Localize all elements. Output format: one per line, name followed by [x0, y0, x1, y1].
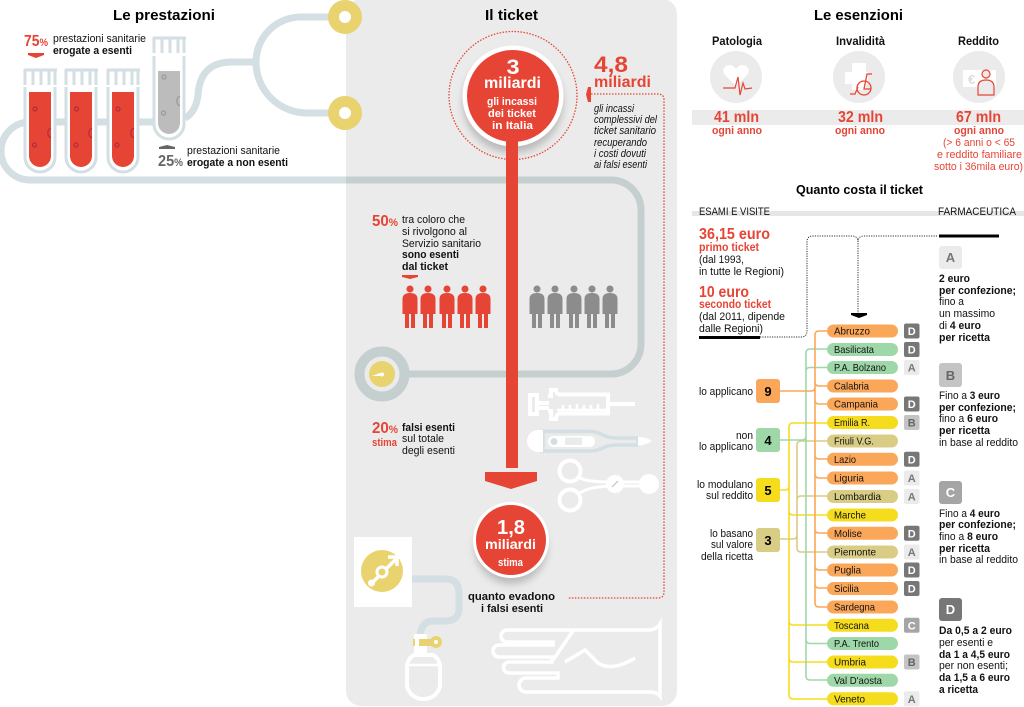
farmaceutica: tier B	[939, 363, 1018, 449]
callout: 4,8 miliardi: miliardi	[594, 74, 651, 91]
column: reddito: e reddito familiare	[937, 149, 1022, 161]
panel: il ticket background	[346, 0, 677, 706]
callout: 4,8 miliardi: recuperando	[594, 137, 647, 149]
callout: 4,8 miliardi: ticket sanitario	[594, 125, 656, 137]
column: reddito: ogni anno	[954, 125, 1004, 137]
key box: lo modulano 5: lo modulano	[697, 479, 753, 491]
region: P.A. Trento: P.A. Trento	[834, 638, 879, 650]
farmaceutica: tier C: C	[946, 485, 956, 500]
column: patologia: 41 mln	[714, 109, 759, 126]
region: Lombardia	[827, 489, 920, 504]
text: esami e visite details: in tutte le Regioni)	[699, 266, 784, 278]
dotted circle	[449, 32, 577, 160]
chart: 1,8 miliardi circle: 1,8	[497, 517, 525, 539]
heading: il ticket: Il ticket	[485, 7, 538, 24]
callout: 20 percent: 20%	[372, 420, 398, 437]
callout: 20 percent	[372, 420, 455, 457]
callout: 4,8 miliardi: ai falsi esenti	[594, 159, 647, 171]
connectors: green	[780, 349, 827, 680]
callout: 25 percent: erogate a non esenti	[187, 157, 288, 169]
ring: lower yellow connector	[334, 102, 356, 124]
band: column headers: ESAMI E VISITE	[699, 206, 770, 218]
region: Campania	[827, 396, 920, 412]
column: patologia	[710, 34, 762, 137]
arrow down	[485, 472, 537, 489]
region: Basilicata: Basilicata	[834, 344, 874, 356]
region: Friuli V.G.: Friuli V.G.	[834, 436, 874, 448]
callout: 75 percent	[24, 33, 146, 58]
region: Basilicata	[827, 342, 920, 357]
dotted connector: to regions	[760, 236, 938, 337]
text: esami e visite details: 10 euro	[699, 284, 749, 301]
people: red exempt group	[402, 286, 490, 328]
callout: 4,8 miliardi	[586, 52, 657, 171]
region: Molise: D	[908, 528, 916, 540]
icon: IV bottle	[407, 634, 442, 699]
key box: lo basano 3: della ricetta	[701, 551, 754, 563]
column: reddito: 67 mln	[956, 109, 1001, 126]
callout: 50 percent: Servizio sanitario	[402, 238, 481, 250]
key box: lo modulano 5	[697, 478, 780, 502]
white circle border	[462, 46, 564, 146]
key box: lo modulano 5: 5	[764, 483, 772, 498]
region: Toscana	[827, 618, 920, 633]
farmaceutica: tier C: fino a 8 euro	[939, 531, 998, 543]
region: Marche	[827, 508, 898, 522]
text: esami e visite details: secondo ticket	[699, 297, 771, 311]
text: esami e visite details: dalle Regioni)	[699, 323, 763, 335]
region: Sardegna: Sardegna	[834, 602, 875, 614]
region: Basilicata: D	[908, 344, 916, 356]
chart: 1,8 miliardi circle	[473, 502, 549, 584]
heading: quanto costa il ticket: Quanto costa il ticket	[796, 182, 924, 197]
heading: le esenzioni: Le esenzioni	[814, 7, 903, 24]
column: reddito: (> 6 anni o < 65	[943, 137, 1015, 149]
chart: 1,8 miliardi circle: miliardi	[485, 536, 536, 552]
callout: 25 percent	[158, 145, 288, 170]
key box: non lo applicano 4	[699, 428, 780, 453]
column: invalidita: 32 mln	[838, 109, 883, 126]
column: invalidita	[833, 34, 885, 137]
farmaceutica: tier B: per confezione;	[939, 402, 1016, 414]
region: Puglia	[827, 562, 920, 578]
farmaceutica: tier D: per non esenti;	[939, 660, 1008, 672]
region: Piemonte: Piemonte	[834, 546, 876, 558]
callout: 50 percent	[372, 213, 481, 279]
region: Veneto: Veneto	[834, 693, 865, 705]
bar: farmaceutica black rule	[939, 234, 999, 238]
bar: esami black rule	[699, 336, 760, 339]
callout: 20 percent: degli esenti	[402, 445, 455, 457]
chart: 1,8 miliardi circle: stima	[498, 557, 524, 569]
farmaceutica: tier D: da 1 a 4,5 euro	[939, 649, 1010, 661]
column: reddito: €	[968, 72, 975, 87]
region: Lombardia: A	[908, 492, 916, 504]
region: P.A. Bolzano: P.A. Bolzano	[834, 362, 886, 374]
callout: 75 percent: prestazioni sanitarie	[53, 33, 146, 45]
farmaceutica: tier A	[939, 246, 1016, 344]
icon: syringe	[530, 390, 635, 419]
region: Sicilia	[827, 581, 920, 596]
icon: glove	[493, 624, 660, 696]
key box: lo applicano 9	[699, 379, 780, 403]
region: Toscana: C	[908, 620, 916, 632]
ring: stethoscope end	[360, 352, 404, 396]
band: column headers: FARMACEUTICA	[938, 206, 1017, 218]
region: Campania: D	[908, 399, 916, 411]
region: Liguria	[827, 470, 920, 486]
column: patologia: Patologia	[712, 34, 762, 48]
farmaceutica: tier C: Fino a 4 euro	[939, 508, 1000, 520]
region: Puglia: Puglia	[834, 564, 861, 576]
region: Toscana: Toscana	[834, 620, 869, 632]
region: Abruzzo	[827, 324, 920, 338]
callout: 20 percent: falsi esenti	[402, 422, 455, 434]
region: P.A. Trento	[827, 637, 898, 650]
tube: red 3	[107, 69, 140, 172]
section: le prestazioni	[24, 6, 356, 172]
region: Friuli V.G.	[827, 434, 898, 448]
callout: 25 percent: 25%	[158, 153, 183, 170]
region: Piemonte: A	[908, 547, 916, 559]
callout: 75 percent: 75%	[24, 33, 48, 50]
icon: thermometer	[527, 430, 652, 452]
farmaceutica: tier A: un massimo	[939, 308, 995, 320]
ring: upper yellow connector	[334, 6, 356, 28]
circle shadow	[463, 53, 563, 153]
region: Veneto	[827, 691, 920, 706]
region: Lazio: Lazio	[834, 454, 856, 466]
callout: 50 percent: dal ticket	[402, 261, 448, 273]
callout: 4,8 miliardi: gli incassi	[594, 103, 634, 115]
region: Emilia R.	[827, 415, 920, 430]
text: esami e visite details: (dal 1993,	[699, 254, 744, 266]
farmaceutica: tier D: a ricetta	[939, 684, 979, 696]
column: invalidita: ogni anno	[835, 125, 885, 137]
region: Emilia R.: B	[908, 418, 916, 430]
circle text: in Italia	[492, 120, 534, 132]
key box: lo basano 3	[701, 528, 780, 563]
farmaceutica: tier A: per confezione;	[939, 285, 1016, 297]
region: P.A. Bolzano: A	[908, 362, 916, 374]
region: Abruzzo: Abruzzo	[834, 326, 870, 338]
farmaceutica: tier A: fino a	[939, 296, 965, 308]
farmaceutica: tier B: B	[946, 368, 955, 383]
circle text: gli incassi	[487, 96, 537, 108]
region: Puglia: D	[908, 565, 916, 577]
farmaceutica: tier B: in base al reddito	[939, 437, 1018, 449]
key box: lo basano 3: lo basano	[710, 528, 753, 540]
callout: 25 percent: prestazioni sanitarie	[187, 145, 280, 157]
band: column headers	[692, 206, 1024, 218]
callout: 4,8 miliardi: complessivi del	[594, 114, 657, 126]
connectors: yellow	[780, 423, 827, 699]
farmaceutica: tier A: A	[946, 250, 956, 265]
farmaceutica: tier C: per confezione;	[939, 519, 1016, 531]
region: Lazio: D	[908, 454, 916, 466]
text: esami e visite details: (dal 2011, dipende	[699, 311, 785, 323]
circle text: miliardi	[484, 75, 541, 92]
connectors: orange	[780, 331, 827, 607]
tube: grey	[153, 37, 186, 139]
region: Liguria: A	[908, 473, 916, 485]
region: Molise: Molise	[834, 528, 862, 540]
farmaceutica: tier D	[939, 598, 1012, 696]
region: Abruzzo: D	[908, 326, 916, 338]
farmaceutica: tier A: di 4 euro	[939, 320, 981, 332]
text: esami e visite details: primo ticket	[699, 240, 759, 254]
callout: 50 percent: si rivolgono al	[402, 226, 467, 238]
region: Calabria	[827, 380, 898, 392]
key box: lo modulano 5: sul reddito	[706, 490, 753, 502]
circle text: 3	[506, 56, 520, 79]
callout: 20 percent: sul totale	[402, 433, 444, 445]
list: regions	[827, 324, 920, 706]
region: Umbria: Umbria	[834, 656, 866, 668]
text: quanto evadono: quanto evadono	[468, 591, 555, 603]
tube: red 1	[24, 69, 57, 172]
region: P.A. Bolzano	[827, 360, 920, 375]
red circle	[467, 50, 559, 142]
key box: lo applicano 9: 9	[764, 384, 772, 399]
farmaceutica: tier B: fino a 6 euro	[939, 413, 998, 425]
callout: 20 percent: stima	[372, 437, 398, 449]
band: totals background	[692, 110, 1024, 125]
text: esami e visite details	[699, 226, 785, 335]
farmaceutica: tier C	[939, 481, 1018, 566]
farmaceutica: tier A: 2 euro	[939, 273, 970, 285]
region: Val D'aosta: Val D'aosta	[834, 675, 882, 687]
callout: 4,8 miliardi: i costi dovuti	[594, 148, 646, 160]
callout: 4,8 miliardi: 4,8	[594, 52, 628, 77]
column: reddito	[934, 34, 1023, 173]
region: Umbria	[827, 654, 920, 670]
callout: 75 percent: erogate a esenti	[53, 45, 132, 57]
pipe: main tube on white	[1, 17, 346, 180]
column: invalidita: Invalidità	[836, 34, 885, 48]
region: Emilia R.: Emilia R.	[834, 417, 870, 429]
callout: 50 percent: 50%	[372, 213, 398, 230]
pipe: main tube on panel	[346, 180, 641, 374]
key box: lo applicano 9: lo applicano	[699, 386, 753, 398]
key box: lo basano 3: 3	[764, 533, 772, 548]
people: grey non-exempt group	[530, 286, 618, 328]
tube: red 2	[65, 69, 98, 172]
icon: gender card	[354, 537, 412, 607]
callout: 50 percent: tra coloro che	[402, 214, 465, 226]
farmaceutica: tier B: Fino a 3 euro	[939, 390, 1000, 402]
farmaceutica: tier D: Da 0,5 a 2 euro	[939, 625, 1012, 637]
key box: non lo applicano 4: lo applicano	[699, 441, 753, 453]
column: patologia: ogni anno	[712, 125, 762, 137]
key box: lo basano 3: sul valore	[711, 539, 753, 551]
farmaceutica: tier C: in base al reddito	[939, 554, 1018, 566]
region: Sicilia: D	[908, 584, 916, 596]
key box: non lo applicano 4: non	[736, 430, 753, 442]
circle text: dei ticket	[488, 108, 536, 120]
column: reddito: Reddito	[958, 34, 999, 48]
text: esami e visite details: 36,15 euro	[699, 226, 770, 243]
region: Piemonte	[827, 544, 920, 560]
heading: le prestazioni: Le prestazioni	[113, 7, 215, 24]
region: Molise	[827, 526, 920, 541]
farmaceutica: tier A: per ricetta	[939, 332, 991, 344]
region: Val D'aosta	[827, 674, 898, 687]
red stem	[506, 135, 518, 468]
farmaceutica: tier D: da 1,5 a 6 euro	[939, 672, 1010, 684]
icon: IV tube	[412, 579, 459, 634]
circle text	[484, 56, 541, 132]
dotted connector: recovered total	[568, 94, 664, 598]
region: Calabria: Calabria	[834, 380, 869, 392]
farmaceutica: tier D: per esenti e	[939, 637, 993, 649]
text: quanto evadono: i falsi esenti	[481, 603, 543, 615]
region: Lazio	[827, 452, 920, 467]
region: Liguria: Liguria	[834, 472, 864, 484]
text: quanto evadono	[468, 591, 555, 615]
farmaceutica: tier D: D	[946, 602, 955, 617]
callout: 50 percent: sono esenti	[402, 249, 459, 261]
farmaceutica: tier C: per ricetta	[939, 543, 991, 555]
region: Marche: Marche	[834, 510, 866, 522]
connectors: khaki	[780, 441, 827, 552]
key box: non lo applicano 4: 4	[764, 433, 772, 448]
farmaceutica: tier B: per ricetta	[939, 425, 991, 437]
region: Lombardia: Lombardia	[834, 491, 881, 503]
icon: scissors	[560, 460, 659, 510]
chart: 3 miliardi flow	[449, 32, 577, 489]
region: Umbria: B	[908, 657, 916, 669]
region: Veneto: A	[908, 694, 916, 706]
region: Sicilia: Sicilia	[834, 583, 859, 595]
region: Sardegna	[827, 600, 898, 614]
region: Campania: Campania	[834, 398, 878, 410]
